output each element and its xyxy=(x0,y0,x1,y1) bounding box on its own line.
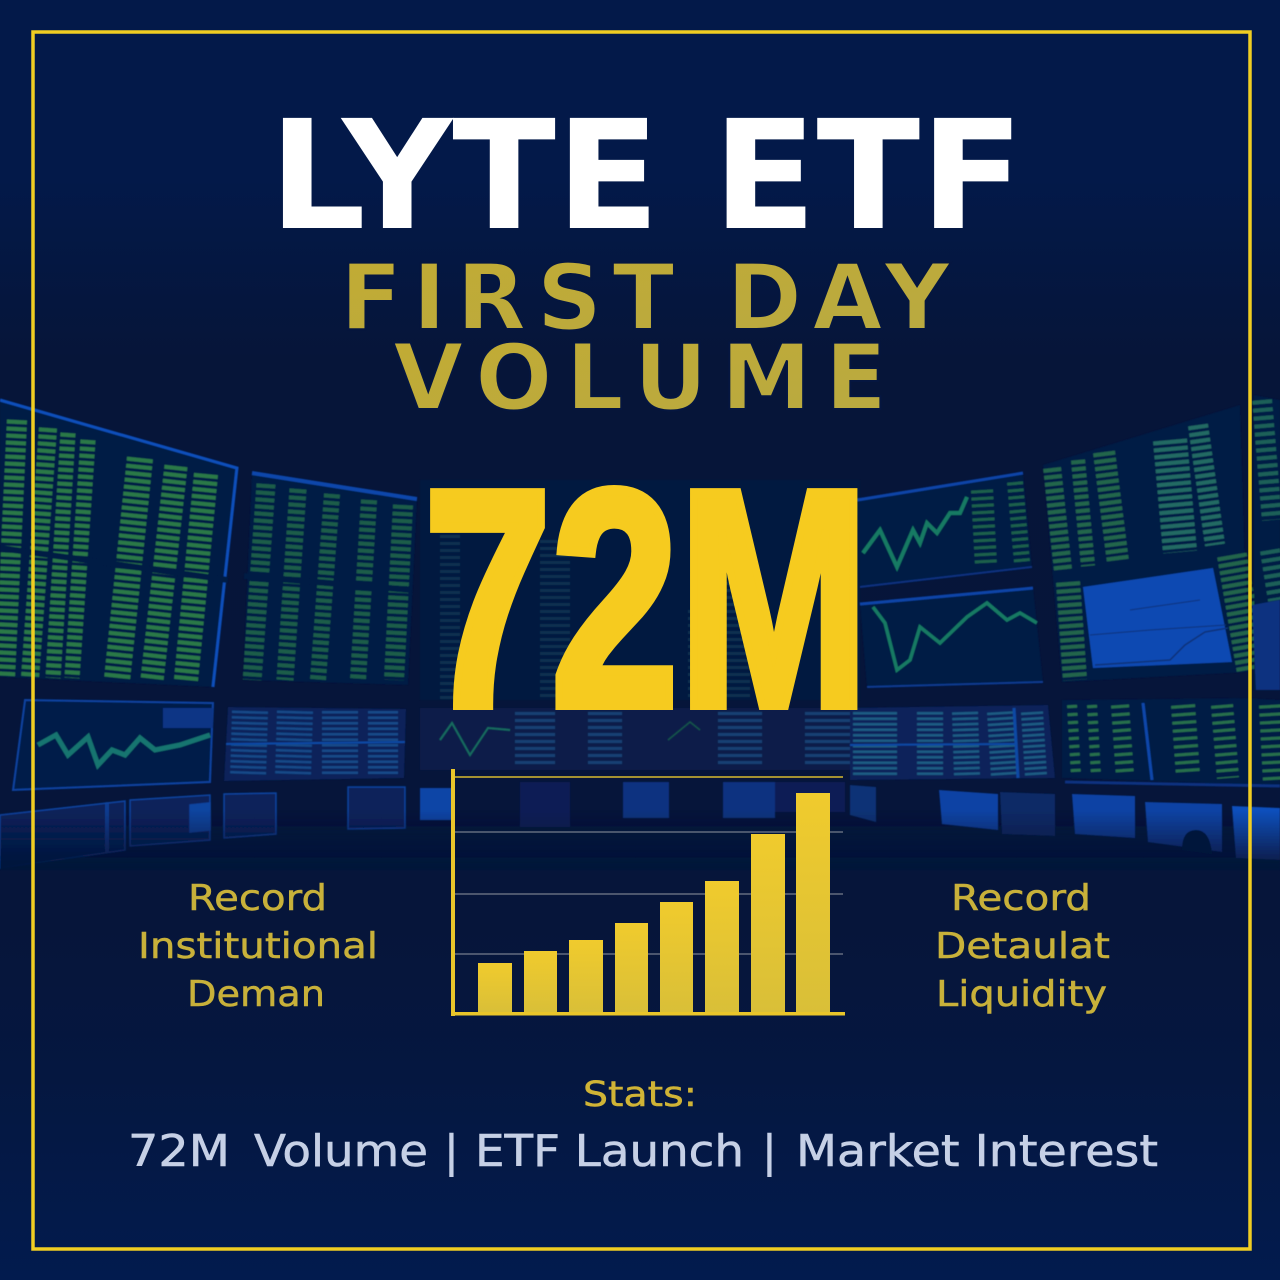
right callout: record default liquidity: Detaulat xyxy=(935,926,1110,967)
stats line: | xyxy=(444,1126,459,1177)
chart axes xyxy=(451,769,845,1016)
left callout: record institutional demand xyxy=(138,878,378,1015)
far right edge data xyxy=(1252,395,1280,690)
right far table xyxy=(1062,698,1280,786)
left callout: record institutional demand: Deman xyxy=(187,974,325,1015)
right blue chart box xyxy=(1083,568,1232,668)
stats line: ETF Launch xyxy=(475,1126,744,1177)
centre dim screens behind the number xyxy=(420,480,860,770)
bar chart xyxy=(451,769,845,1016)
right callout: record default liquidity: Record xyxy=(951,878,1091,919)
right data columns screen xyxy=(1043,405,1252,682)
stats line: Volume xyxy=(254,1126,428,1177)
lower fade xyxy=(0,810,1280,870)
left upper screen xyxy=(0,400,237,687)
stats line xyxy=(128,1126,1158,1177)
right bottom blue panels xyxy=(850,785,1280,860)
left callout: record institutional demand: Record xyxy=(188,878,327,919)
right lower table screen xyxy=(850,705,1055,780)
stats line: Market Interest xyxy=(796,1126,1158,1177)
right callout: record default liquidity xyxy=(935,878,1110,1015)
right callout: record default liquidity: Liquidity xyxy=(936,974,1107,1015)
left lower table screen xyxy=(224,707,406,781)
centre small blue panels xyxy=(420,782,845,827)
left callout: record institutional demand: Institutional xyxy=(138,926,378,967)
stats line: 72M xyxy=(128,1126,230,1177)
right chart screen two xyxy=(860,587,1043,687)
stats line: | xyxy=(762,1126,777,1177)
big number: 72M: 72M xyxy=(424,427,869,771)
subtitle: first day volume: VOLUME xyxy=(393,326,887,431)
title: LYTE ETF: LYTE ETF xyxy=(269,88,1024,264)
subtitle: first day volume: FIRST DAY xyxy=(340,246,951,351)
right chart screen one xyxy=(857,473,1032,587)
left lower chart screen xyxy=(13,700,213,790)
stats label: Stats: xyxy=(583,1075,697,1115)
trading floor screens backdrop xyxy=(0,395,1280,870)
left second screen xyxy=(243,472,417,685)
subtitle: first day volume xyxy=(340,246,951,431)
left bottom panels xyxy=(0,787,405,868)
bars xyxy=(478,793,830,1013)
